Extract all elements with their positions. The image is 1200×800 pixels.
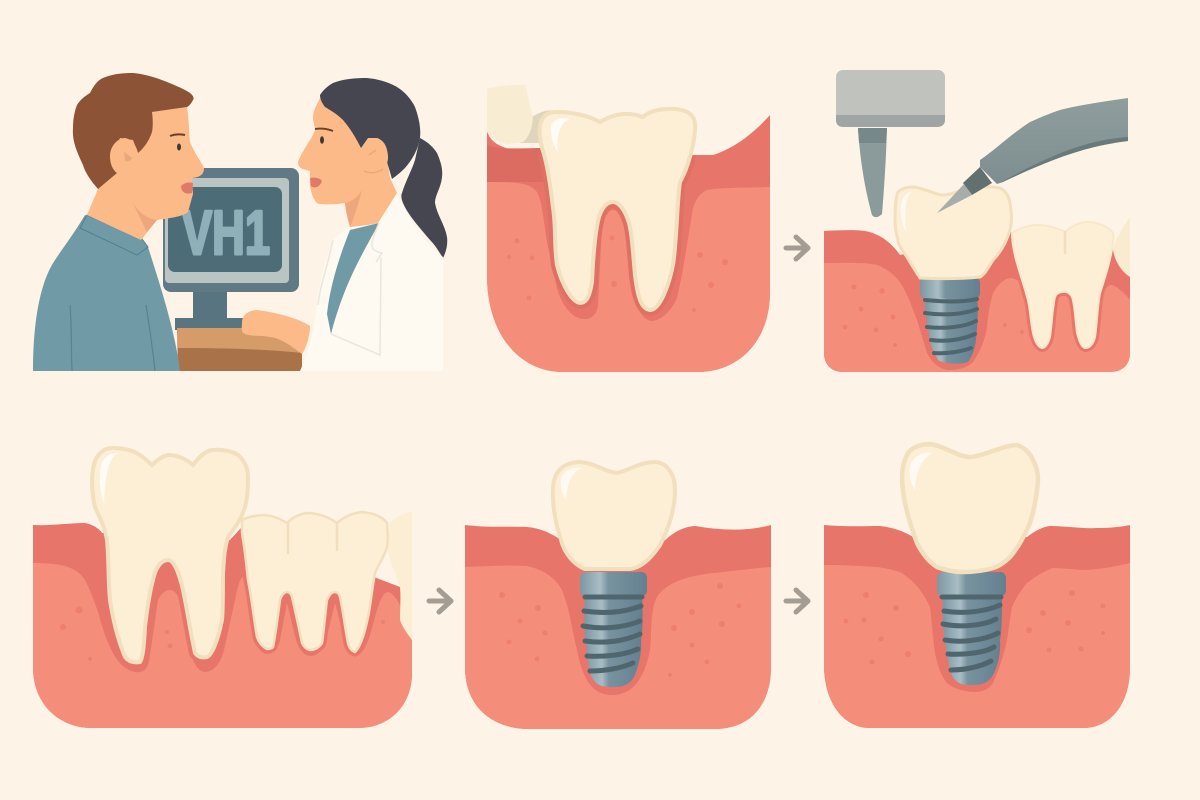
crown highlight bbox=[561, 467, 582, 500]
arrow bbox=[429, 590, 451, 612]
third tooth bbox=[1113, 217, 1130, 277]
panel: finished implant crown bbox=[824, 444, 1130, 728]
gum bbox=[465, 525, 771, 729]
gum bbox=[487, 115, 770, 372]
panel: natural tooth in gum bbox=[487, 85, 770, 372]
dentist hair bbox=[320, 78, 420, 179]
large tooth socket bbox=[98, 528, 241, 659]
infographic: dental implant steps bbox=[33, 70, 1130, 729]
patient face and neck bbox=[87, 107, 204, 240]
dentist ear bbox=[362, 138, 388, 175]
crown bbox=[902, 444, 1038, 572]
patient bbox=[33, 73, 204, 371]
implant bbox=[580, 572, 647, 687]
panel: crown placement with tools bbox=[824, 70, 1130, 372]
crown highlight bbox=[910, 453, 933, 490]
arrow bbox=[786, 590, 808, 612]
dental handpiece bbox=[937, 98, 1128, 213]
gum bbox=[33, 523, 412, 728]
neighbouring tooth bbox=[487, 85, 556, 144]
gum bbox=[824, 230, 1130, 372]
patient ear bbox=[110, 138, 138, 175]
arrow bbox=[786, 237, 808, 259]
panel: patient and dentist consultation bbox=[33, 73, 447, 371]
dentist bbox=[242, 78, 447, 371]
large tooth bbox=[92, 448, 248, 662]
panel: implant with crown bbox=[465, 462, 771, 729]
second tooth socket bbox=[1010, 232, 1105, 352]
tooth socket outline bbox=[550, 211, 639, 310]
monitor with x-ray bbox=[163, 168, 299, 330]
natural tooth bbox=[540, 109, 695, 310]
second tooth bbox=[1012, 222, 1113, 348]
dentist face and neck bbox=[298, 98, 397, 227]
desk bbox=[177, 328, 305, 371]
gum bbox=[824, 525, 1130, 728]
crown bbox=[553, 462, 675, 569]
patient shirt bbox=[33, 215, 180, 371]
third tooth bbox=[388, 511, 412, 640]
dentist coat bbox=[300, 193, 443, 371]
molar tooth bbox=[242, 512, 388, 652]
dentist hand bbox=[242, 310, 310, 354]
dentist scrubs bbox=[327, 223, 379, 334]
monitor text: VH1 bbox=[182, 199, 270, 268]
implant bbox=[920, 278, 980, 364]
panel: adjacent teeth with gap bbox=[33, 448, 412, 728]
hammer tool bbox=[836, 70, 945, 217]
molar socket bbox=[238, 528, 378, 656]
patient hair bbox=[73, 73, 194, 189]
implant bbox=[937, 572, 1006, 685]
dentist ponytail bbox=[401, 138, 447, 258]
crown bbox=[895, 187, 1012, 279]
